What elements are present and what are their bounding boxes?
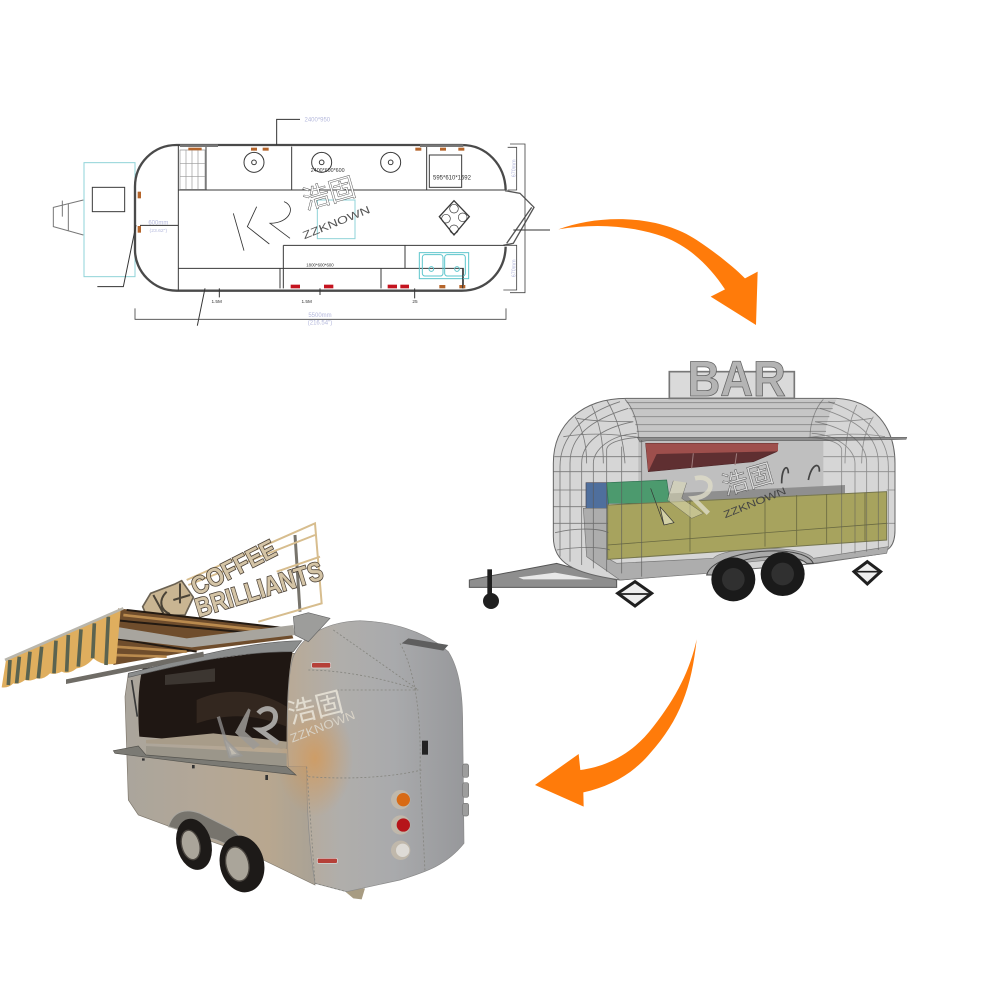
wheel arch bbox=[707, 551, 813, 575]
dimension labels: (216.54") bbox=[308, 321, 332, 327]
wireframe grid right bbox=[808, 399, 895, 553]
watermark: 浩固 bbox=[719, 458, 777, 501]
wheel arch bbox=[168, 811, 263, 860]
watermark bbox=[651, 458, 788, 525]
blue cabinet bbox=[586, 483, 608, 510]
jockey wheel bbox=[483, 569, 499, 609]
awning roller bbox=[5, 608, 123, 660]
burners bbox=[244, 152, 401, 172]
plan labels: 1.5M bbox=[301, 299, 312, 304]
awning support beam bbox=[115, 625, 295, 647]
watermark bbox=[218, 686, 357, 757]
BAR sign: BAR bbox=[687, 351, 786, 407]
dimension labels: 2400*950 bbox=[305, 117, 331, 123]
gas strut bbox=[132, 680, 137, 717]
interior details bbox=[146, 668, 287, 749]
shell bbox=[553, 398, 895, 580]
grid shelf bbox=[180, 150, 205, 189]
rear tongue bbox=[343, 888, 365, 899]
window opening bbox=[138, 648, 293, 749]
plan labels: 1800*600*600 bbox=[306, 263, 334, 268]
watermark bbox=[233, 172, 372, 251]
rear roof vent bbox=[402, 638, 448, 651]
upper roof panel bbox=[625, 399, 837, 437]
dimension labels: 670mm bbox=[511, 259, 517, 277]
olive counter bbox=[608, 492, 887, 559]
hatch lift arm bbox=[66, 652, 204, 684]
hinge bracket bbox=[293, 613, 330, 642]
panel seams bbox=[307, 630, 425, 892]
cyan worktop zone bbox=[317, 200, 355, 239]
red extractor hood bbox=[646, 443, 778, 472]
sunset reflection bbox=[277, 700, 353, 817]
open hatch bbox=[128, 641, 302, 677]
sink bbox=[419, 253, 469, 279]
wireframe grid left bbox=[553, 399, 642, 577]
arrow: plan to model bbox=[558, 219, 758, 325]
lower skirt bbox=[583, 508, 888, 580]
inner box bbox=[92, 187, 125, 212]
watermark: 浩固 bbox=[299, 172, 359, 216]
dimension lines bbox=[135, 144, 525, 319]
awning rail bbox=[637, 437, 907, 442]
side body bbox=[125, 653, 315, 885]
watermark: ZZKNOWN bbox=[301, 204, 372, 242]
leader lines bbox=[97, 119, 550, 326]
door bbox=[503, 191, 534, 245]
plan labels: 2400*600*600 bbox=[311, 168, 345, 174]
grey worktop bbox=[670, 485, 845, 507]
roof bands bbox=[627, 403, 835, 431]
dimension labels: 600mm bbox=[148, 220, 168, 226]
green tray bbox=[607, 480, 670, 503]
red outlets bbox=[291, 285, 409, 288]
plan labels bbox=[211, 168, 472, 304]
arrow: model to truck bbox=[535, 639, 697, 807]
marker lights bbox=[312, 663, 337, 863]
tow bar bbox=[53, 200, 83, 235]
interior wall bbox=[638, 437, 823, 517]
stool symbol bbox=[439, 201, 469, 235]
support jacks bbox=[618, 562, 881, 606]
awning underside bbox=[113, 608, 293, 665]
plan labels: 595*610*1692 bbox=[433, 176, 472, 182]
floor plan drawing bbox=[53, 117, 550, 327]
sockets bbox=[138, 148, 465, 288]
interior walls bbox=[178, 145, 505, 291]
plan labels: 1.5M bbox=[211, 299, 222, 304]
rooftop sign: BRILLIANTS bbox=[191, 556, 327, 623]
dimension labels: 670mm bbox=[511, 159, 517, 177]
trailer shell bbox=[135, 145, 506, 291]
dimension labels bbox=[148, 117, 517, 327]
plan labels: 25 bbox=[412, 299, 418, 304]
side connectors bbox=[463, 764, 469, 816]
serving shelf bbox=[113, 746, 296, 780]
wheels bbox=[711, 552, 805, 601]
faucets bbox=[782, 465, 819, 483]
watermark: ZZKNOWN bbox=[722, 486, 788, 521]
rooftop sign bbox=[143, 523, 327, 623]
rooftop sign: COFFEE bbox=[187, 535, 281, 601]
door latch bbox=[422, 741, 428, 755]
tail lights bbox=[391, 790, 410, 860]
fridge box bbox=[429, 155, 462, 187]
dimension labels: (23.62") bbox=[150, 228, 167, 234]
finished food trailer photo bbox=[2, 523, 469, 899]
serving window rails bbox=[180, 142, 463, 150]
rear shell bbox=[287, 621, 464, 892]
dimension labels: 5500mm bbox=[308, 313, 332, 319]
watermark: 浩固 bbox=[285, 686, 346, 730]
3D wireframe model bbox=[469, 351, 907, 609]
cyan tow-hitch zone bbox=[84, 163, 135, 277]
striped valance bbox=[2, 609, 121, 687]
watermark: ZZKNOWN bbox=[288, 708, 357, 745]
chassis and drawbar bbox=[469, 563, 617, 587]
wheels bbox=[171, 815, 270, 897]
